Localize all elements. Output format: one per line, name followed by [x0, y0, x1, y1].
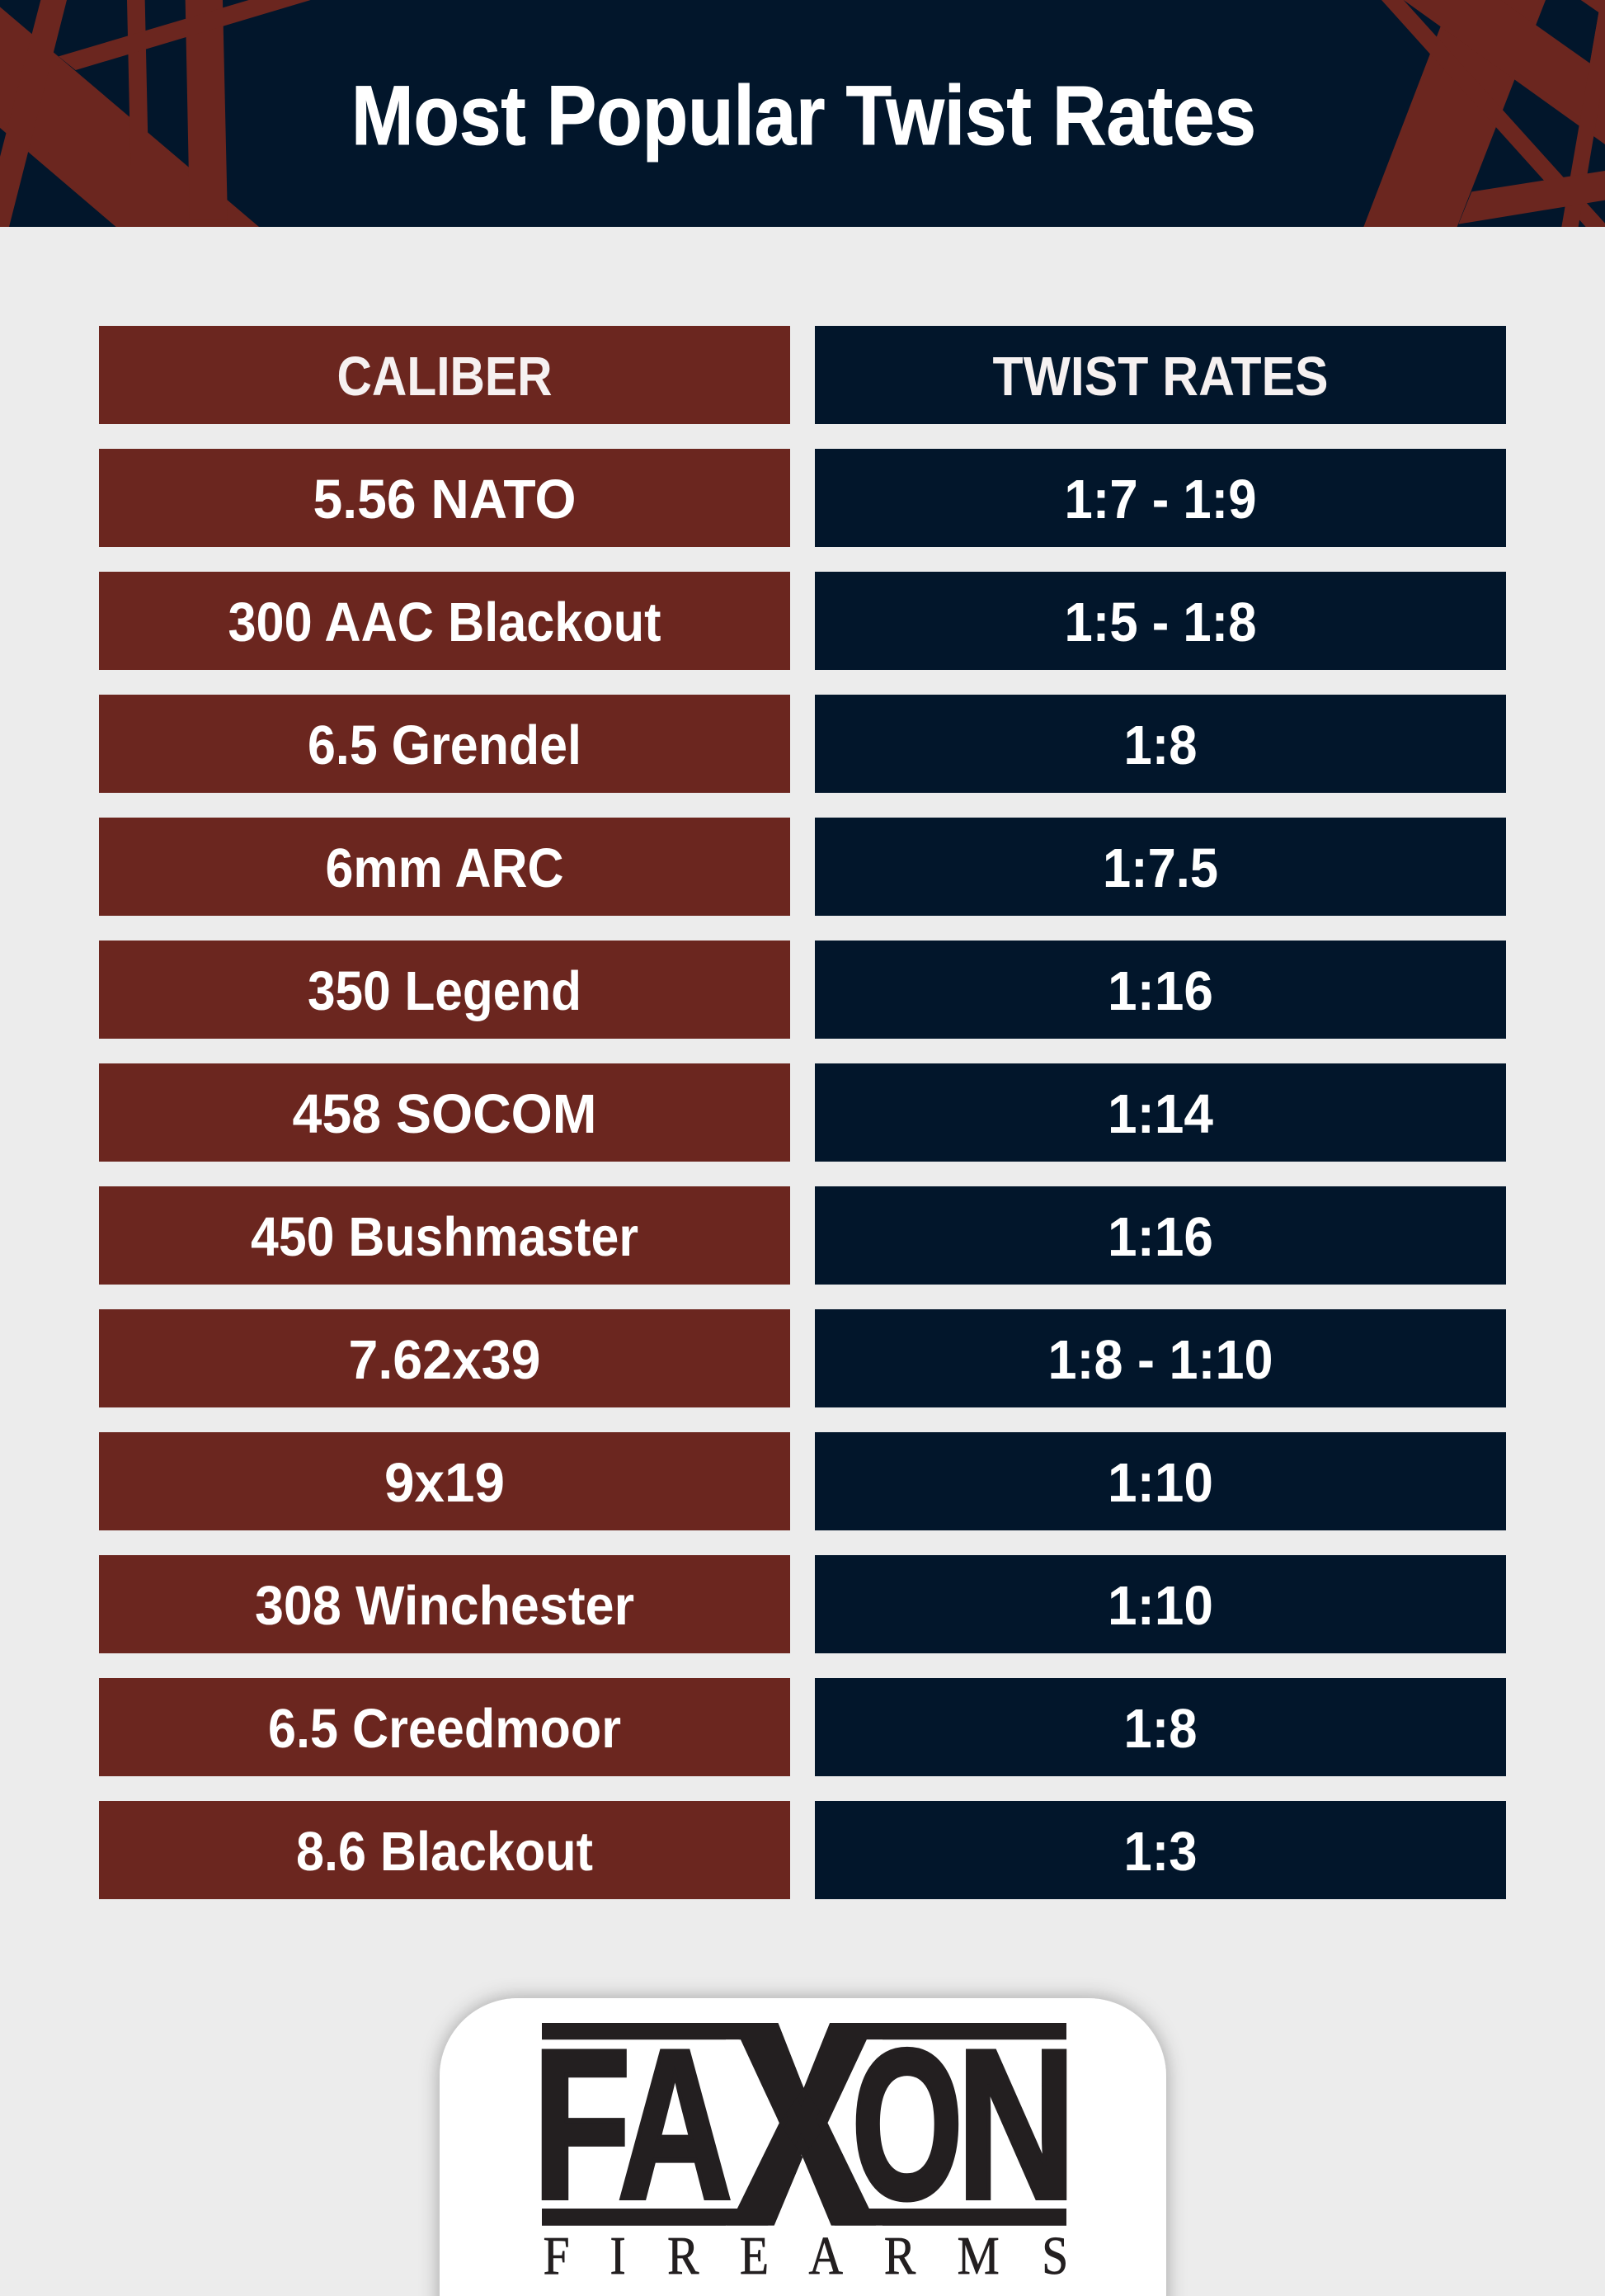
row: 458 SOCOM: 458 SOCOM: [292, 1083, 597, 1145]
logo X negative space: [726, 2013, 883, 2236]
decorative rifling lines left: [0, 0, 311, 227]
row: 5.56 NATO: [99, 449, 1506, 547]
row: 5.56 NATO: 5.56 NATO: [313, 469, 576, 530]
row: table header: CALIBER: [337, 346, 553, 408]
logo wordmark FAON letters: [533, 2005, 1075, 2244]
row: 450 Bushmaster: [99, 1186, 1506, 1285]
row: 5.56 NATO: 1:7 - 1:9: [1064, 469, 1257, 530]
row: 6.5 Grendel: [99, 695, 1506, 793]
logo card: [440, 1998, 1166, 2296]
row: 308 Winchester: 308 Winchester: [255, 1575, 634, 1637]
row: 6mm ARC: [99, 818, 1506, 916]
logo wordmark FAON letters: O: [852, 2005, 963, 2243]
row: 6.5 Creedmoor: 1:8: [1123, 1698, 1198, 1760]
decorative rifling lines right: [1363, 0, 1605, 227]
row: 300 AAC Blackout: 300 AAC Blackout: [228, 592, 661, 653]
row: 308 Winchester: [99, 1555, 1506, 1653]
row: 6mm ARC: 1:7.5: [1103, 837, 1218, 899]
row: 450 Bushmaster: 1:16: [1108, 1206, 1213, 1268]
header banner: [0, 0, 1605, 227]
logo frame bars: [542, 2023, 1066, 2226]
row: 458 SOCOM: 1:14: [1108, 1083, 1213, 1145]
row: 308 Winchester: 1:10: [1108, 1575, 1213, 1637]
logo: Faxon Firearms: [533, 1968, 1075, 2286]
logo wordmark FAON letters: A: [618, 2006, 732, 2244]
row: 7.62x39: 1:8 - 1:10: [1047, 1329, 1273, 1391]
logo wordmark FAON letters: F: [533, 2006, 631, 2243]
row: 7.62x39: [99, 1309, 1506, 1407]
row: 6mm ARC: 6mm ARC: [325, 837, 564, 899]
row: 8.6 Blackout: 8.6 Blackout: [296, 1821, 593, 1883]
row: 6.5 Creedmoor: [99, 1678, 1506, 1776]
title: Most Popular Twist Rates: [351, 68, 1256, 163]
row: 458 SOCOM: [99, 1063, 1506, 1162]
row: 300 AAC Blackout: 1:5 - 1:8: [1064, 592, 1257, 653]
row: table header: [99, 326, 1506, 424]
row: 9x19: 9x19: [384, 1452, 505, 1514]
row: 9x19: [99, 1432, 1506, 1530]
logo letter X: X: [732, 1968, 871, 2280]
row: 7.62x39: 7.62x39: [348, 1329, 541, 1391]
row: 350 Legend: 350 Legend: [308, 960, 581, 1022]
row: 350 Legend: 1:16: [1108, 960, 1213, 1022]
row: table header: TWIST RATES: [993, 346, 1328, 408]
row: 8.6 Blackout: 1:3: [1123, 1821, 1198, 1883]
row: 6.5 Grendel: 1:8: [1123, 714, 1198, 776]
table: [99, 326, 1506, 1899]
logo wordmark FAON letters: N: [957, 2005, 1075, 2243]
row: 450 Bushmaster: 450 Bushmaster: [251, 1206, 638, 1268]
row: 8.6 Blackout: [99, 1801, 1506, 1899]
row: 300 AAC Blackout: [99, 572, 1506, 670]
row: 350 Legend: [99, 941, 1506, 1039]
row: 9x19: 1:10: [1108, 1452, 1213, 1514]
row: 6.5 Creedmoor: 6.5 Creedmoor: [268, 1698, 621, 1760]
row: 6.5 Grendel: 6.5 Grendel: [308, 714, 581, 776]
logo subtitle FIREARMS: FIREARMS: [544, 2226, 1068, 2286]
